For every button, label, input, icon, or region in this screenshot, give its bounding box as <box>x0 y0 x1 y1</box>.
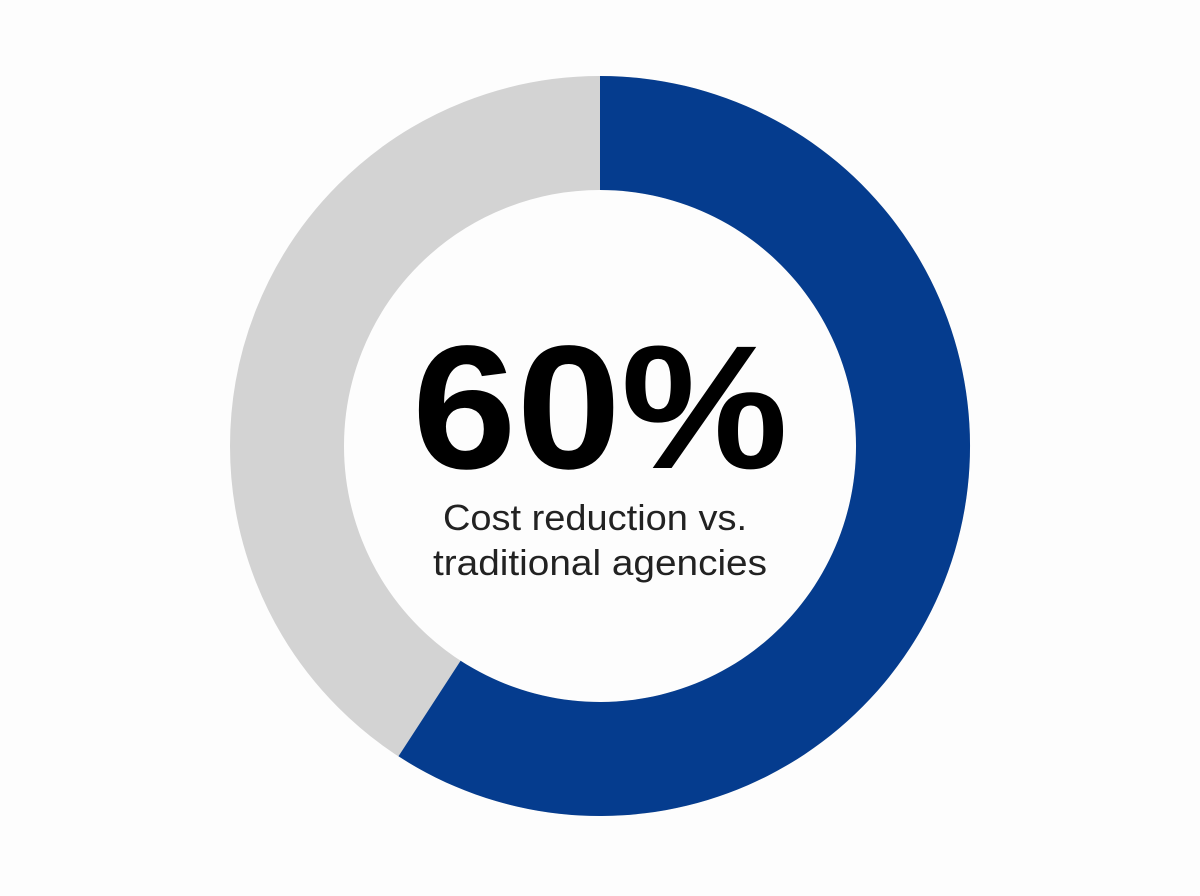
caption: traditional agencies <box>433 542 767 583</box>
remaining segment (gray) <box>287 133 913 759</box>
donut chart <box>287 76 970 816</box>
big number: 60% <box>412 310 788 506</box>
60% segment (blue) <box>398 76 970 816</box>
caption <box>433 497 767 583</box>
caption: Cost reduction vs. <box>443 497 747 538</box>
